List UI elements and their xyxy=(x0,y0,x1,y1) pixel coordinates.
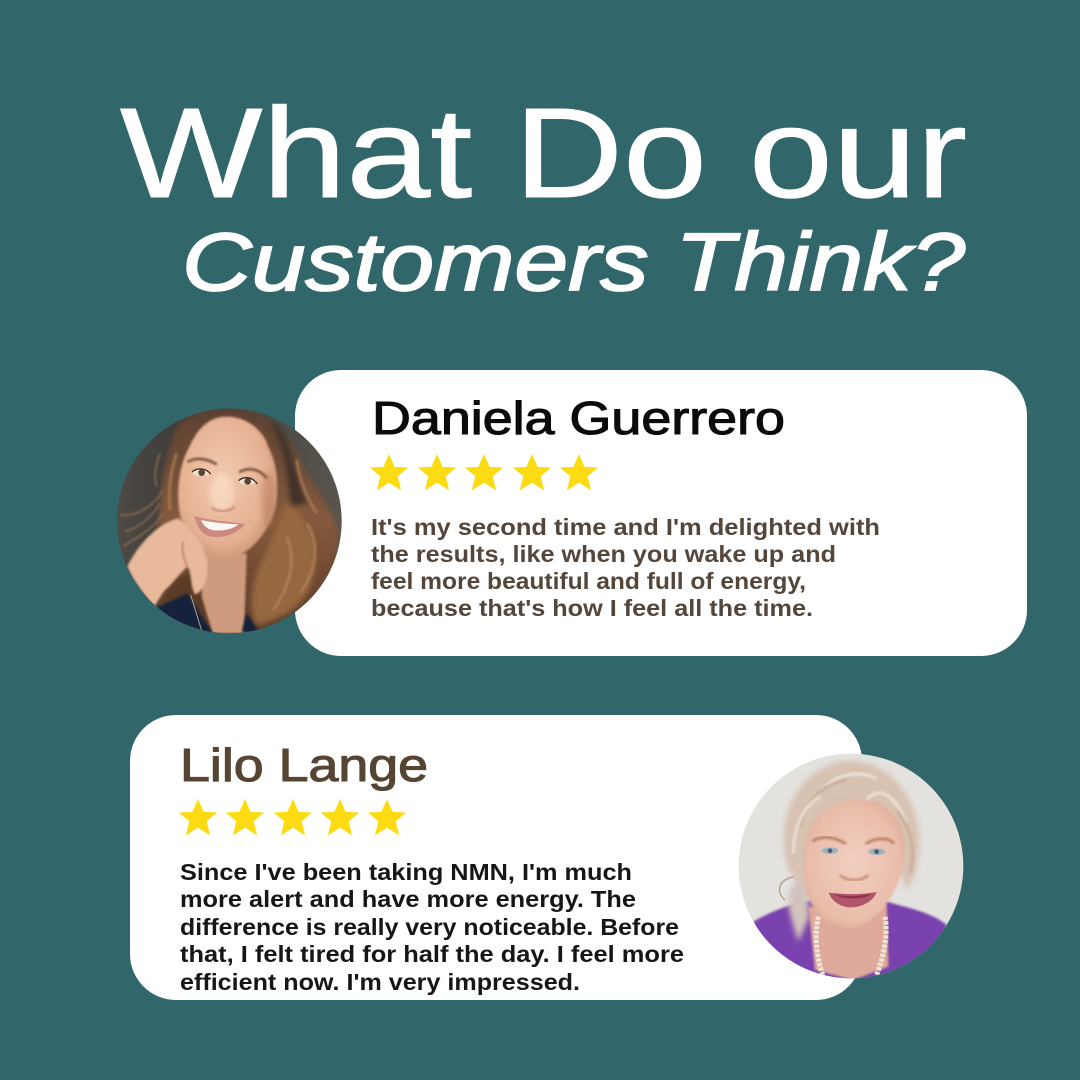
face xyxy=(803,799,905,928)
cheek and nose shading xyxy=(210,474,234,513)
lips xyxy=(194,516,245,537)
testimonial text: difference is really very noticeable. Before xyxy=(180,914,679,940)
eyebrows xyxy=(813,837,893,843)
pearl necklace xyxy=(816,917,886,975)
testimonial text: Since I've been taking NMN, I'm much xyxy=(180,859,632,885)
five star rating xyxy=(179,799,406,836)
face xyxy=(178,417,277,561)
navy top xyxy=(150,593,260,633)
eyes xyxy=(822,847,838,854)
nose xyxy=(840,875,868,880)
nose xyxy=(212,507,235,511)
hair strands xyxy=(793,774,913,873)
neck and chest xyxy=(202,553,247,633)
card background xyxy=(295,370,1027,656)
panel: review by Lilo Lange xyxy=(130,715,862,1000)
loose hair wisps xyxy=(120,453,163,547)
panel: review by Daniela Guerrero xyxy=(295,370,1027,656)
eyebrows xyxy=(188,459,266,477)
testimonial text: the results, like when you wake up and xyxy=(371,541,836,567)
teeth xyxy=(201,520,239,530)
testimonial text: more alert and have more energy. The xyxy=(180,886,636,912)
testimonial text: feel more beautiful and full of energy, xyxy=(371,568,806,594)
title xyxy=(120,82,967,308)
testimonial text xyxy=(371,514,880,621)
title: What Do our xyxy=(120,82,967,225)
title: Customers Think? xyxy=(182,217,965,308)
neck and chest xyxy=(808,903,888,980)
necklace xyxy=(191,595,202,631)
purple top xyxy=(753,900,947,983)
hair xyxy=(784,761,919,942)
testimonial text xyxy=(180,859,684,995)
testimonial text: It's my second time and I'm delighted with xyxy=(371,514,880,540)
testimonial text: that, I felt tired for half the day. I feel more xyxy=(180,941,684,967)
card background xyxy=(130,715,862,1000)
customer name: Daniela Guerrero xyxy=(372,392,785,444)
portrait: Lilo Lange xyxy=(733,750,973,983)
eyes xyxy=(193,469,209,476)
testimonial text: because that's how I feel all the time. xyxy=(371,595,813,621)
portrait: Daniela Guerrero xyxy=(113,403,347,637)
customer name: Lilo Lange xyxy=(180,739,428,791)
five star rating xyxy=(370,454,598,490)
hand xyxy=(127,518,207,607)
mouth xyxy=(829,892,877,907)
hair highlights xyxy=(169,453,317,610)
testimonial text: efficient now. I'm very impressed. xyxy=(180,969,580,995)
